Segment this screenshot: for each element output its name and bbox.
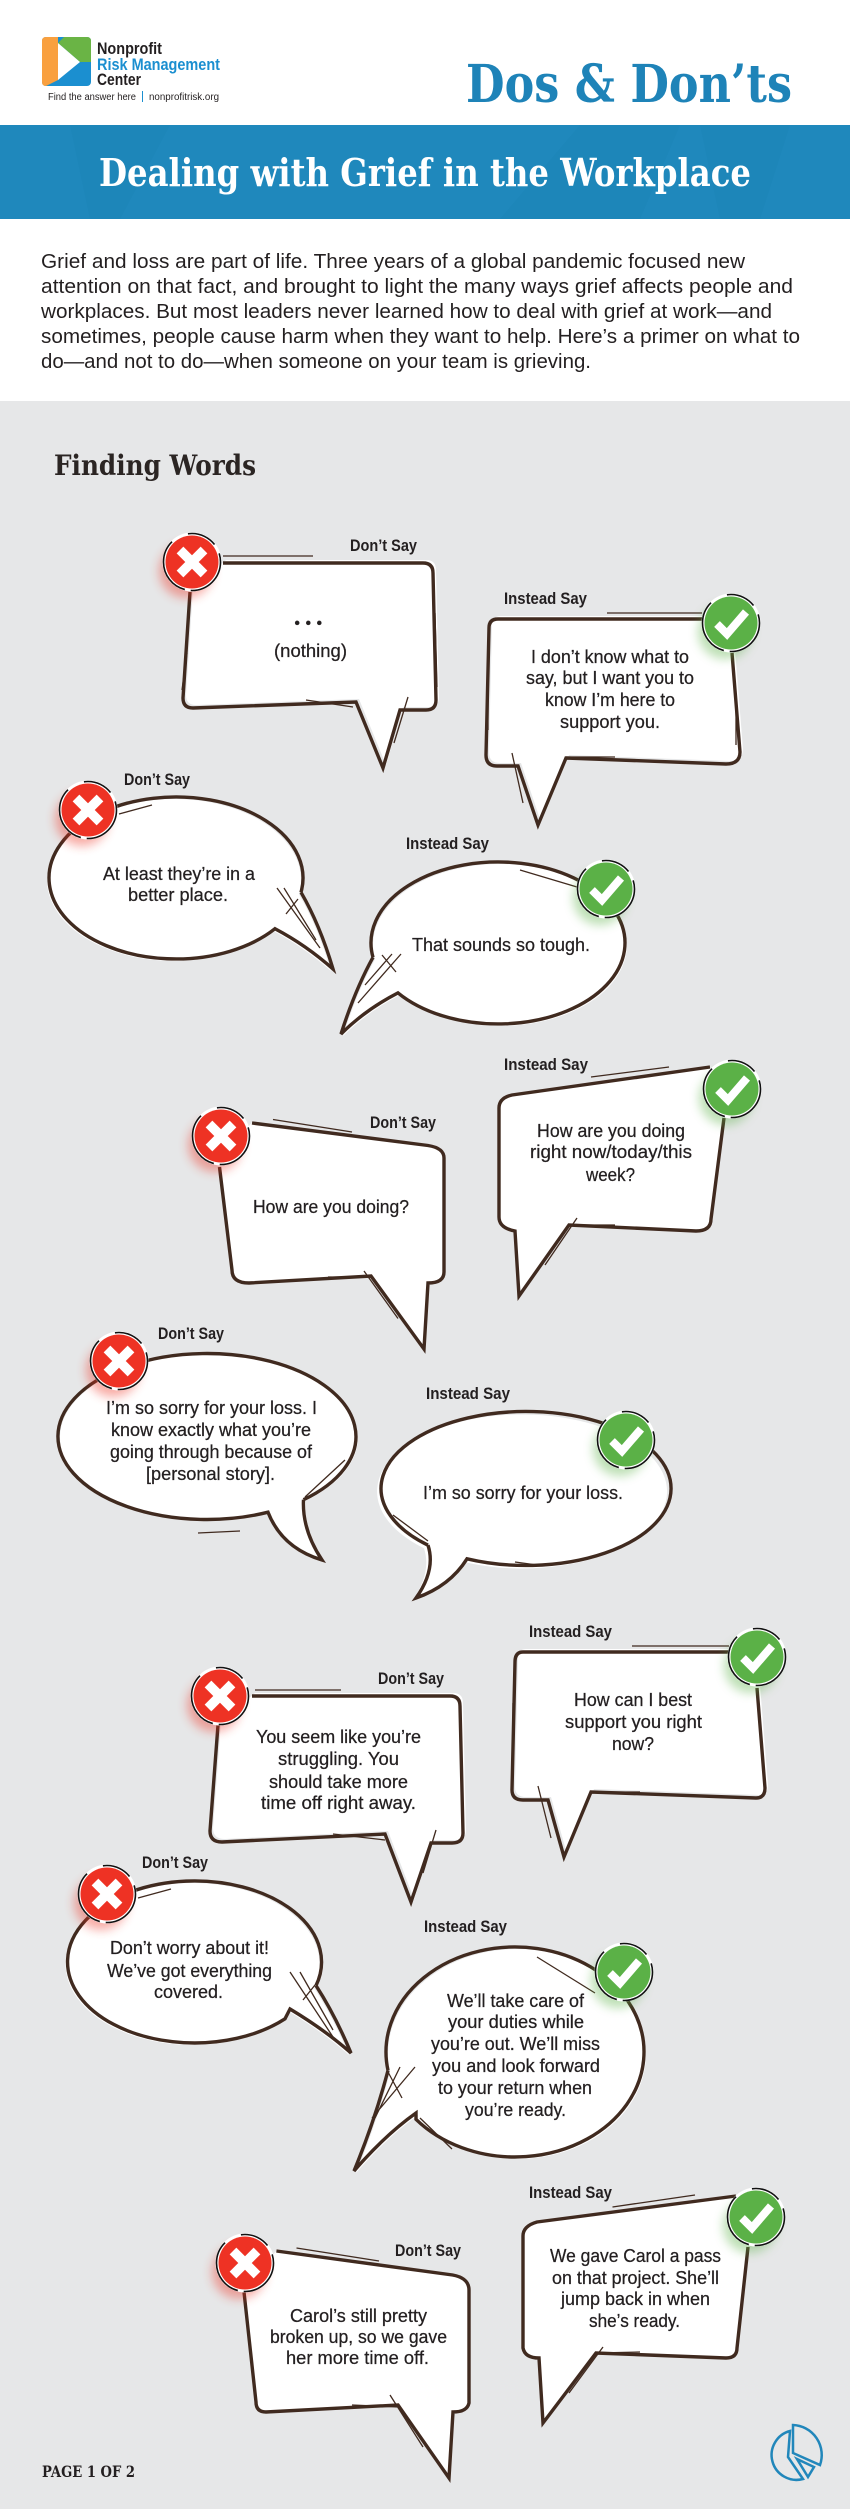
bubble 12: instead say we'll take care bbox=[354, 1917, 654, 2173]
bubble 8: instead say sorry for your loss: I’m so sorry for your loss. bbox=[423, 1483, 623, 1503]
bubble 11: don't say don't worry: Don’t Say bbox=[142, 1853, 208, 1872]
bubble 12: instead say we'll take care: you and look forward bbox=[432, 2056, 600, 2076]
bubble 1: don't say nothing bbox=[159, 532, 439, 768]
bubble 14: instead say gave Carol a pass: jump back in when bbox=[560, 2289, 710, 2309]
bubble 6: instead say right now: right now/today/this bbox=[530, 1142, 692, 1162]
intro text: Grief and loss are part of life. Three years of a global pandemic focused new bbox=[41, 251, 746, 273]
bubble 7: don't say sorry with personal story: Don’t Say bbox=[158, 1324, 224, 1343]
page number: PAGE 1 OF 2 bbox=[42, 2462, 135, 2481]
icon: pie chart bbox=[772, 2425, 822, 2480]
heading: Dos & Don'ts: Dos & Don’ts bbox=[466, 54, 792, 115]
icon: green check bbox=[698, 594, 760, 659]
bubble 9: don't say take time off: time off right away. bbox=[261, 1793, 416, 1813]
header: white background bbox=[0, 0, 850, 401]
bubble 9: don't say take time off bbox=[187, 1666, 466, 1902]
bubble 10: instead say how can I best support: Instead Say bbox=[529, 1622, 612, 1641]
bubble 12: instead say we'll take care: your duties while bbox=[448, 2012, 584, 2032]
bubble 11: don't say don't worry bbox=[66, 1853, 351, 2055]
icon: logo mark bbox=[42, 37, 91, 86]
bubble 14: instead say gave Carol a pass: We gave Carol a pass bbox=[550, 2246, 721, 2266]
bubble 14: instead say gave Carol a pass: she’s ready. bbox=[589, 2311, 680, 2331]
icon: red x bbox=[55, 780, 118, 846]
icon: green check bbox=[724, 1628, 786, 1693]
bubble 9: don't say take time off: struggling. You bbox=[278, 1749, 399, 1769]
bubble 7: don't say sorry with personal story: going through because of bbox=[110, 1442, 313, 1462]
icon: red x bbox=[187, 1666, 250, 1732]
bubble 2: instead say I don't know: Instead Say bbox=[504, 589, 587, 608]
bubble 8: instead say sorry for your loss bbox=[377, 1384, 671, 1601]
bubble 1: don't say nothing: (nothing) bbox=[274, 641, 347, 661]
bubble 3: don't say better place: At least they’re in a bbox=[103, 864, 256, 884]
intro text: sometimes, people cause harm when they want to help. Here’s a primer on what to bbox=[41, 326, 800, 348]
bubble 12: instead say we'll take care: We’ll take care of bbox=[447, 1991, 585, 2011]
bubble 13: don't say Carol's broken up bbox=[212, 2234, 470, 2478]
bubble 13: don't say Carol's broken up: her more time off. bbox=[286, 2348, 429, 2368]
bubble 10: instead say how can I best support: support you right bbox=[565, 1712, 702, 1732]
bubble 9: don't say take time off: You seem like you’re bbox=[256, 1727, 421, 1747]
logo: Nonprofit Risk Management Center: Nonprofit bbox=[97, 39, 162, 58]
bubble 8: instead say sorry for your loss: Instead Say bbox=[426, 1384, 510, 1403]
bubble 7: don't say sorry with personal story: know exactly what you’re bbox=[111, 1420, 311, 1440]
bubble 10: instead say how can I best support: How can I best bbox=[574, 1690, 692, 1710]
intro text: workplaces. But most leaders never learned how to deal with grief at work—and bbox=[40, 301, 772, 323]
bubble 11: don't say don't worry: We’ve got everything bbox=[107, 1961, 272, 1981]
icon: red x bbox=[86, 1332, 148, 1397]
logo: Nonprofit Risk Management Center: Risk Management bbox=[97, 55, 220, 74]
bubble 12: instead say we'll take care: you’re out. We’ll miss bbox=[431, 2034, 600, 2054]
bubble 6: instead say right now bbox=[499, 1055, 762, 1296]
bubble 5: don't say how are you doing: How are you doing? bbox=[253, 1197, 409, 1217]
bubble 1: don't say nothing: ••• bbox=[294, 615, 328, 632]
bubble 10: instead say how can I best support: now? bbox=[612, 1734, 654, 1754]
bubble 9: don't say take time off: should take more bbox=[269, 1772, 408, 1792]
bubble 6: instead say right now: week? bbox=[585, 1165, 635, 1185]
bubble 4: instead say sounds tough: That sounds so tough. bbox=[412, 935, 590, 955]
icon: green check bbox=[699, 1060, 762, 1125]
bubble 13: don't say Carol's broken up: Don’t Say bbox=[395, 2241, 461, 2260]
icon: green check bbox=[723, 2188, 786, 2253]
bubble 13: don't say Carol's broken up: Carol’s still pretty bbox=[290, 2306, 427, 2326]
bubble 14: instead say gave Carol a pass bbox=[523, 2183, 786, 2423]
icon: green check bbox=[573, 860, 636, 925]
logo: Nonprofit Risk Management Center: nonprofitrisk.org bbox=[149, 92, 219, 103]
bubble 6: instead say right now: How are you doing bbox=[537, 1121, 685, 1141]
bubble 14: instead say gave Carol a pass: Instead Say bbox=[529, 2183, 612, 2202]
bubble 2: instead say I don't know bbox=[486, 589, 760, 825]
icon: red x bbox=[188, 1106, 250, 1172]
bubble 5: don't say how are you doing bbox=[188, 1106, 444, 1349]
bubble 7: don't say sorry with personal story bbox=[58, 1324, 358, 1561]
title band bbox=[0, 125, 850, 219]
bubble 4: instead say sounds tough bbox=[341, 834, 636, 1036]
logo: Nonprofit Risk Management Center: Center bbox=[97, 70, 141, 89]
bubble 3: don't say better place: Don’t Say bbox=[124, 770, 190, 789]
heading: Finding Words: Finding Words bbox=[54, 449, 256, 482]
bubble 10: instead say how can I best support bbox=[512, 1622, 786, 1857]
bubble 9: don't say take time off: Don’t Say bbox=[378, 1669, 444, 1688]
bubble 3: don't say better place bbox=[47, 770, 333, 971]
icon: red x bbox=[212, 2234, 274, 2299]
icon: red x bbox=[159, 532, 222, 598]
bubble 12: instead say we'll take care: you’re ready. bbox=[465, 2100, 566, 2120]
intro text: do—and not to do—when someone on your team is grieving. bbox=[41, 351, 591, 373]
title band: Dealing with Grief in the Workplace bbox=[99, 150, 751, 195]
intro text bbox=[40, 251, 800, 373]
bubble 7: don't say sorry with personal story: I’m so sorry for your loss. I bbox=[106, 1398, 317, 1418]
bubble 11: don't say don't worry: Don’t worry about it! bbox=[110, 1938, 269, 1958]
bubble 12: instead say we'll take care: to your return when bbox=[438, 2078, 592, 2098]
icon: red x bbox=[74, 1864, 136, 1930]
intro text: attention on that fact, and brought to light the many ways grief affects people and bbox=[41, 276, 793, 298]
bubble 2: instead say I don't know: support you. bbox=[560, 712, 660, 732]
bubble 6: instead say right now: Instead Say bbox=[504, 1055, 588, 1074]
logo: Nonprofit Risk Management Center: Find the answer here bbox=[48, 92, 136, 103]
bubble 11: don't say don't worry: covered. bbox=[154, 1982, 223, 2002]
bubble 14: instead say gave Carol a pass: on that project. She’ll bbox=[552, 2268, 719, 2288]
bubble 3: don't say better place: better place. bbox=[128, 885, 228, 905]
logo: Nonprofit Risk Management Center bbox=[42, 37, 220, 103]
bubble 12: instead say we'll take care: Instead Say bbox=[424, 1917, 507, 1936]
bubble 7: don't say sorry with personal story: [personal story]. bbox=[146, 1464, 275, 1484]
bubble 2: instead say I don't know: know I’m here to bbox=[545, 690, 675, 710]
bubble 5: don't say how are you doing: Don’t Say bbox=[370, 1113, 436, 1132]
icon: green check bbox=[593, 1410, 656, 1476]
bubble 2: instead say I don't know: say, but I want you to bbox=[526, 668, 694, 688]
icon: green check bbox=[591, 1942, 654, 2008]
bubble 4: instead say sounds tough: Instead Say bbox=[406, 834, 489, 853]
bubble 2: instead say I don't know: I don’t know what to bbox=[531, 647, 689, 667]
bubble 13: don't say Carol's broken up: broken up, so we gave bbox=[270, 2327, 447, 2347]
bubble 1: don't say nothing: Don’t Say bbox=[350, 536, 417, 555]
